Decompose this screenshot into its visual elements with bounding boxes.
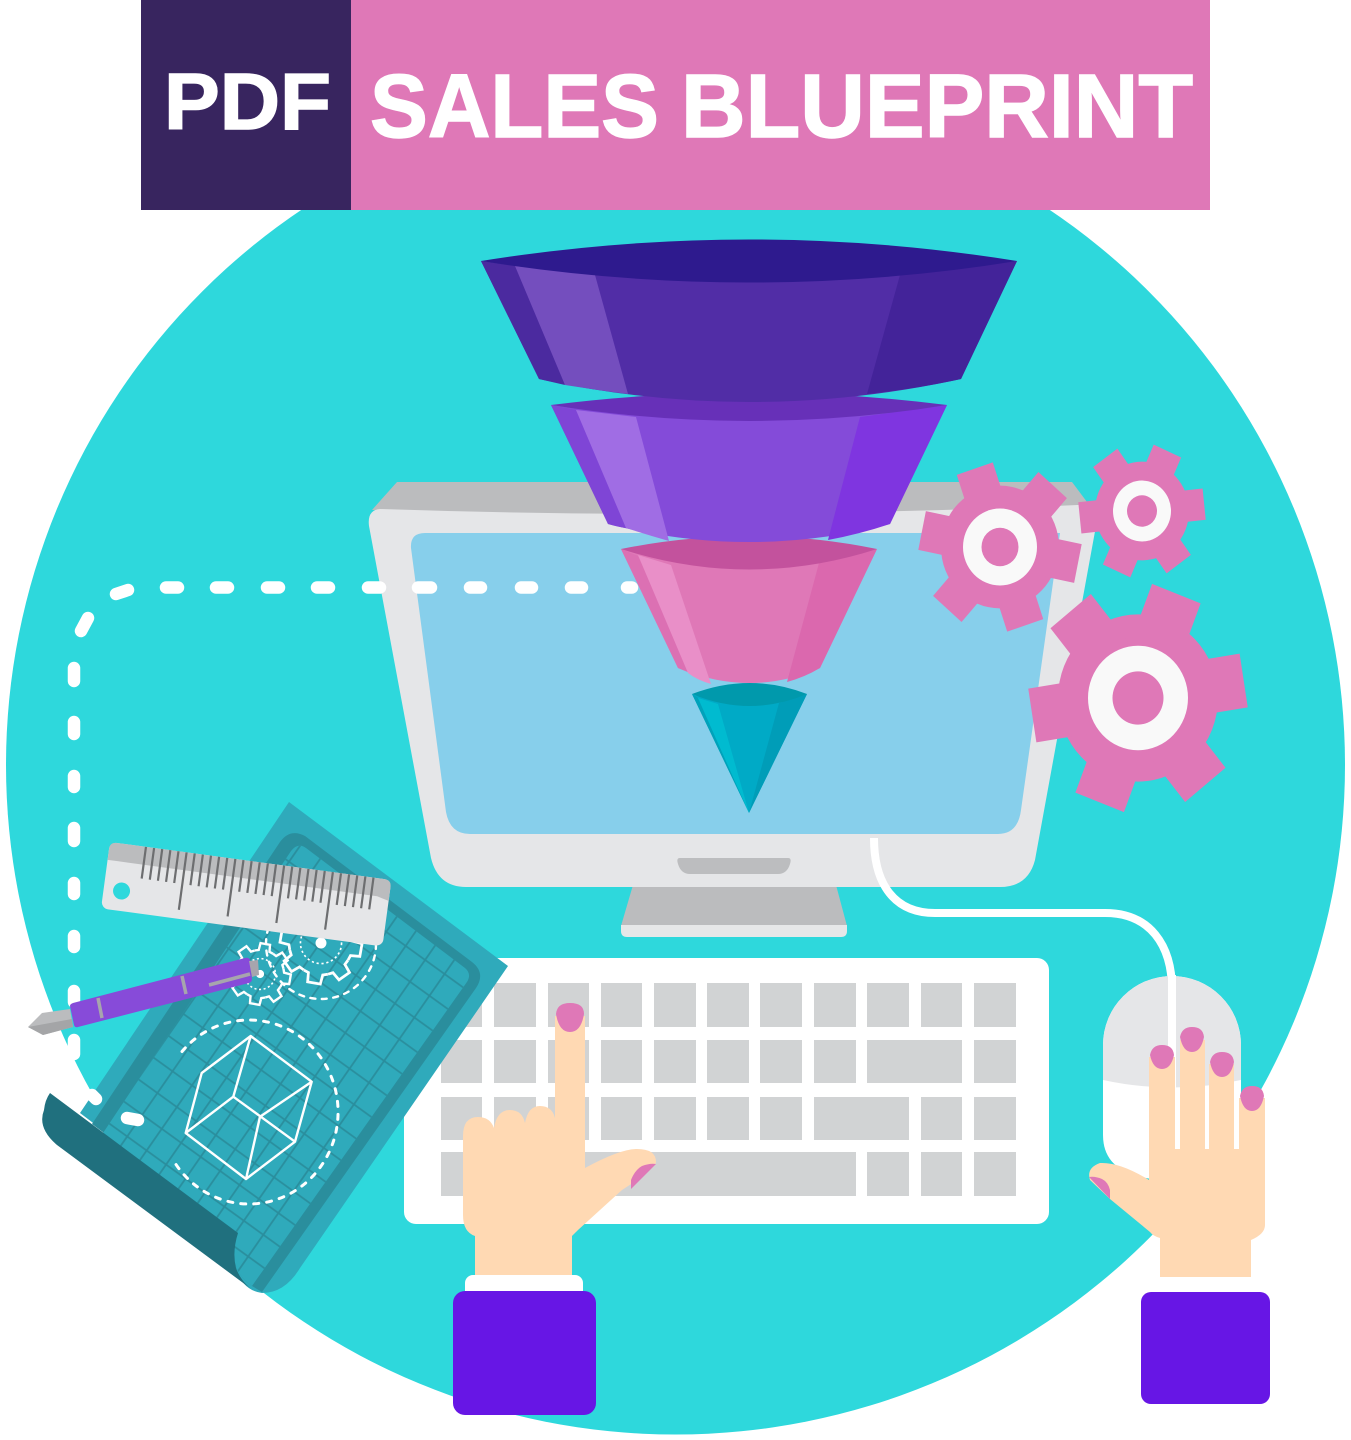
gear top left bbox=[918, 462, 1082, 632]
ruler bbox=[101, 842, 391, 946]
gear top right bbox=[1078, 445, 1206, 577]
blueprint large gear bbox=[279, 901, 363, 985]
left sleeve bbox=[453, 1291, 596, 1415]
gear large bbox=[1028, 584, 1248, 812]
title banner bbox=[141, 0, 1210, 210]
funnel tier 4 bbox=[692, 683, 807, 813]
right hand on mouse bbox=[1089, 1027, 1270, 1404]
monitor back edge bbox=[372, 482, 1090, 520]
monitor button bbox=[677, 858, 791, 874]
funnel tier 2 bbox=[551, 392, 947, 542]
right sleeve bbox=[1141, 1292, 1270, 1404]
banner title word BLUEPRINT: BLUEPRINT bbox=[681, 57, 1193, 157]
funnel tier 3 bbox=[621, 536, 877, 684]
blueprint curled edge bbox=[42, 1093, 254, 1291]
ruler hole bbox=[112, 881, 131, 901]
monitor body bbox=[369, 504, 1100, 887]
monitor bbox=[369, 482, 1100, 937]
right nails bbox=[1089, 1027, 1264, 1199]
computer mouse bbox=[1103, 975, 1241, 1180]
mouse cable bbox=[874, 838, 1172, 1092]
keyboard keys bbox=[441, 983, 1016, 1196]
blueprint dashed circle bbox=[175, 1020, 338, 1204]
banner PDF block bbox=[141, 0, 351, 210]
funnel bbox=[481, 240, 1017, 813]
blueprint large dashed gear circle bbox=[266, 889, 376, 999]
left cuff bbox=[465, 1275, 583, 1305]
pen nib bbox=[28, 1009, 73, 1035]
blueprint sheet bbox=[42, 802, 508, 1300]
pen bands and clip bbox=[98, 974, 250, 1018]
left thumb nail bbox=[631, 1164, 656, 1189]
blueprint inner border bbox=[92, 833, 480, 1292]
keyboard bbox=[404, 958, 1049, 1224]
pen bbox=[28, 958, 259, 1035]
left index nail bbox=[556, 1003, 584, 1032]
blueprint cube drawing bbox=[186, 1036, 312, 1179]
funnel tier 1 bbox=[481, 240, 1017, 402]
banner PDF label: PDF bbox=[164, 57, 331, 146]
right wrist and hand bbox=[1089, 1040, 1265, 1277]
left hand typing bbox=[453, 1003, 656, 1415]
ruler ticks bbox=[138, 847, 374, 935]
pen barrel bbox=[70, 958, 252, 1027]
left wrist and hand bbox=[463, 1016, 656, 1275]
monitor screen bbox=[411, 533, 1060, 834]
monitor stand bbox=[621, 885, 847, 937]
blueprint paper bbox=[80, 802, 508, 1293]
banner title block bbox=[351, 0, 1210, 210]
blueprint grid bbox=[103, 846, 469, 1286]
blueprint small gear bbox=[228, 942, 292, 1006]
dashed route line bbox=[74, 588, 632, 1120]
banner title word SALES: SALES bbox=[370, 57, 659, 157]
